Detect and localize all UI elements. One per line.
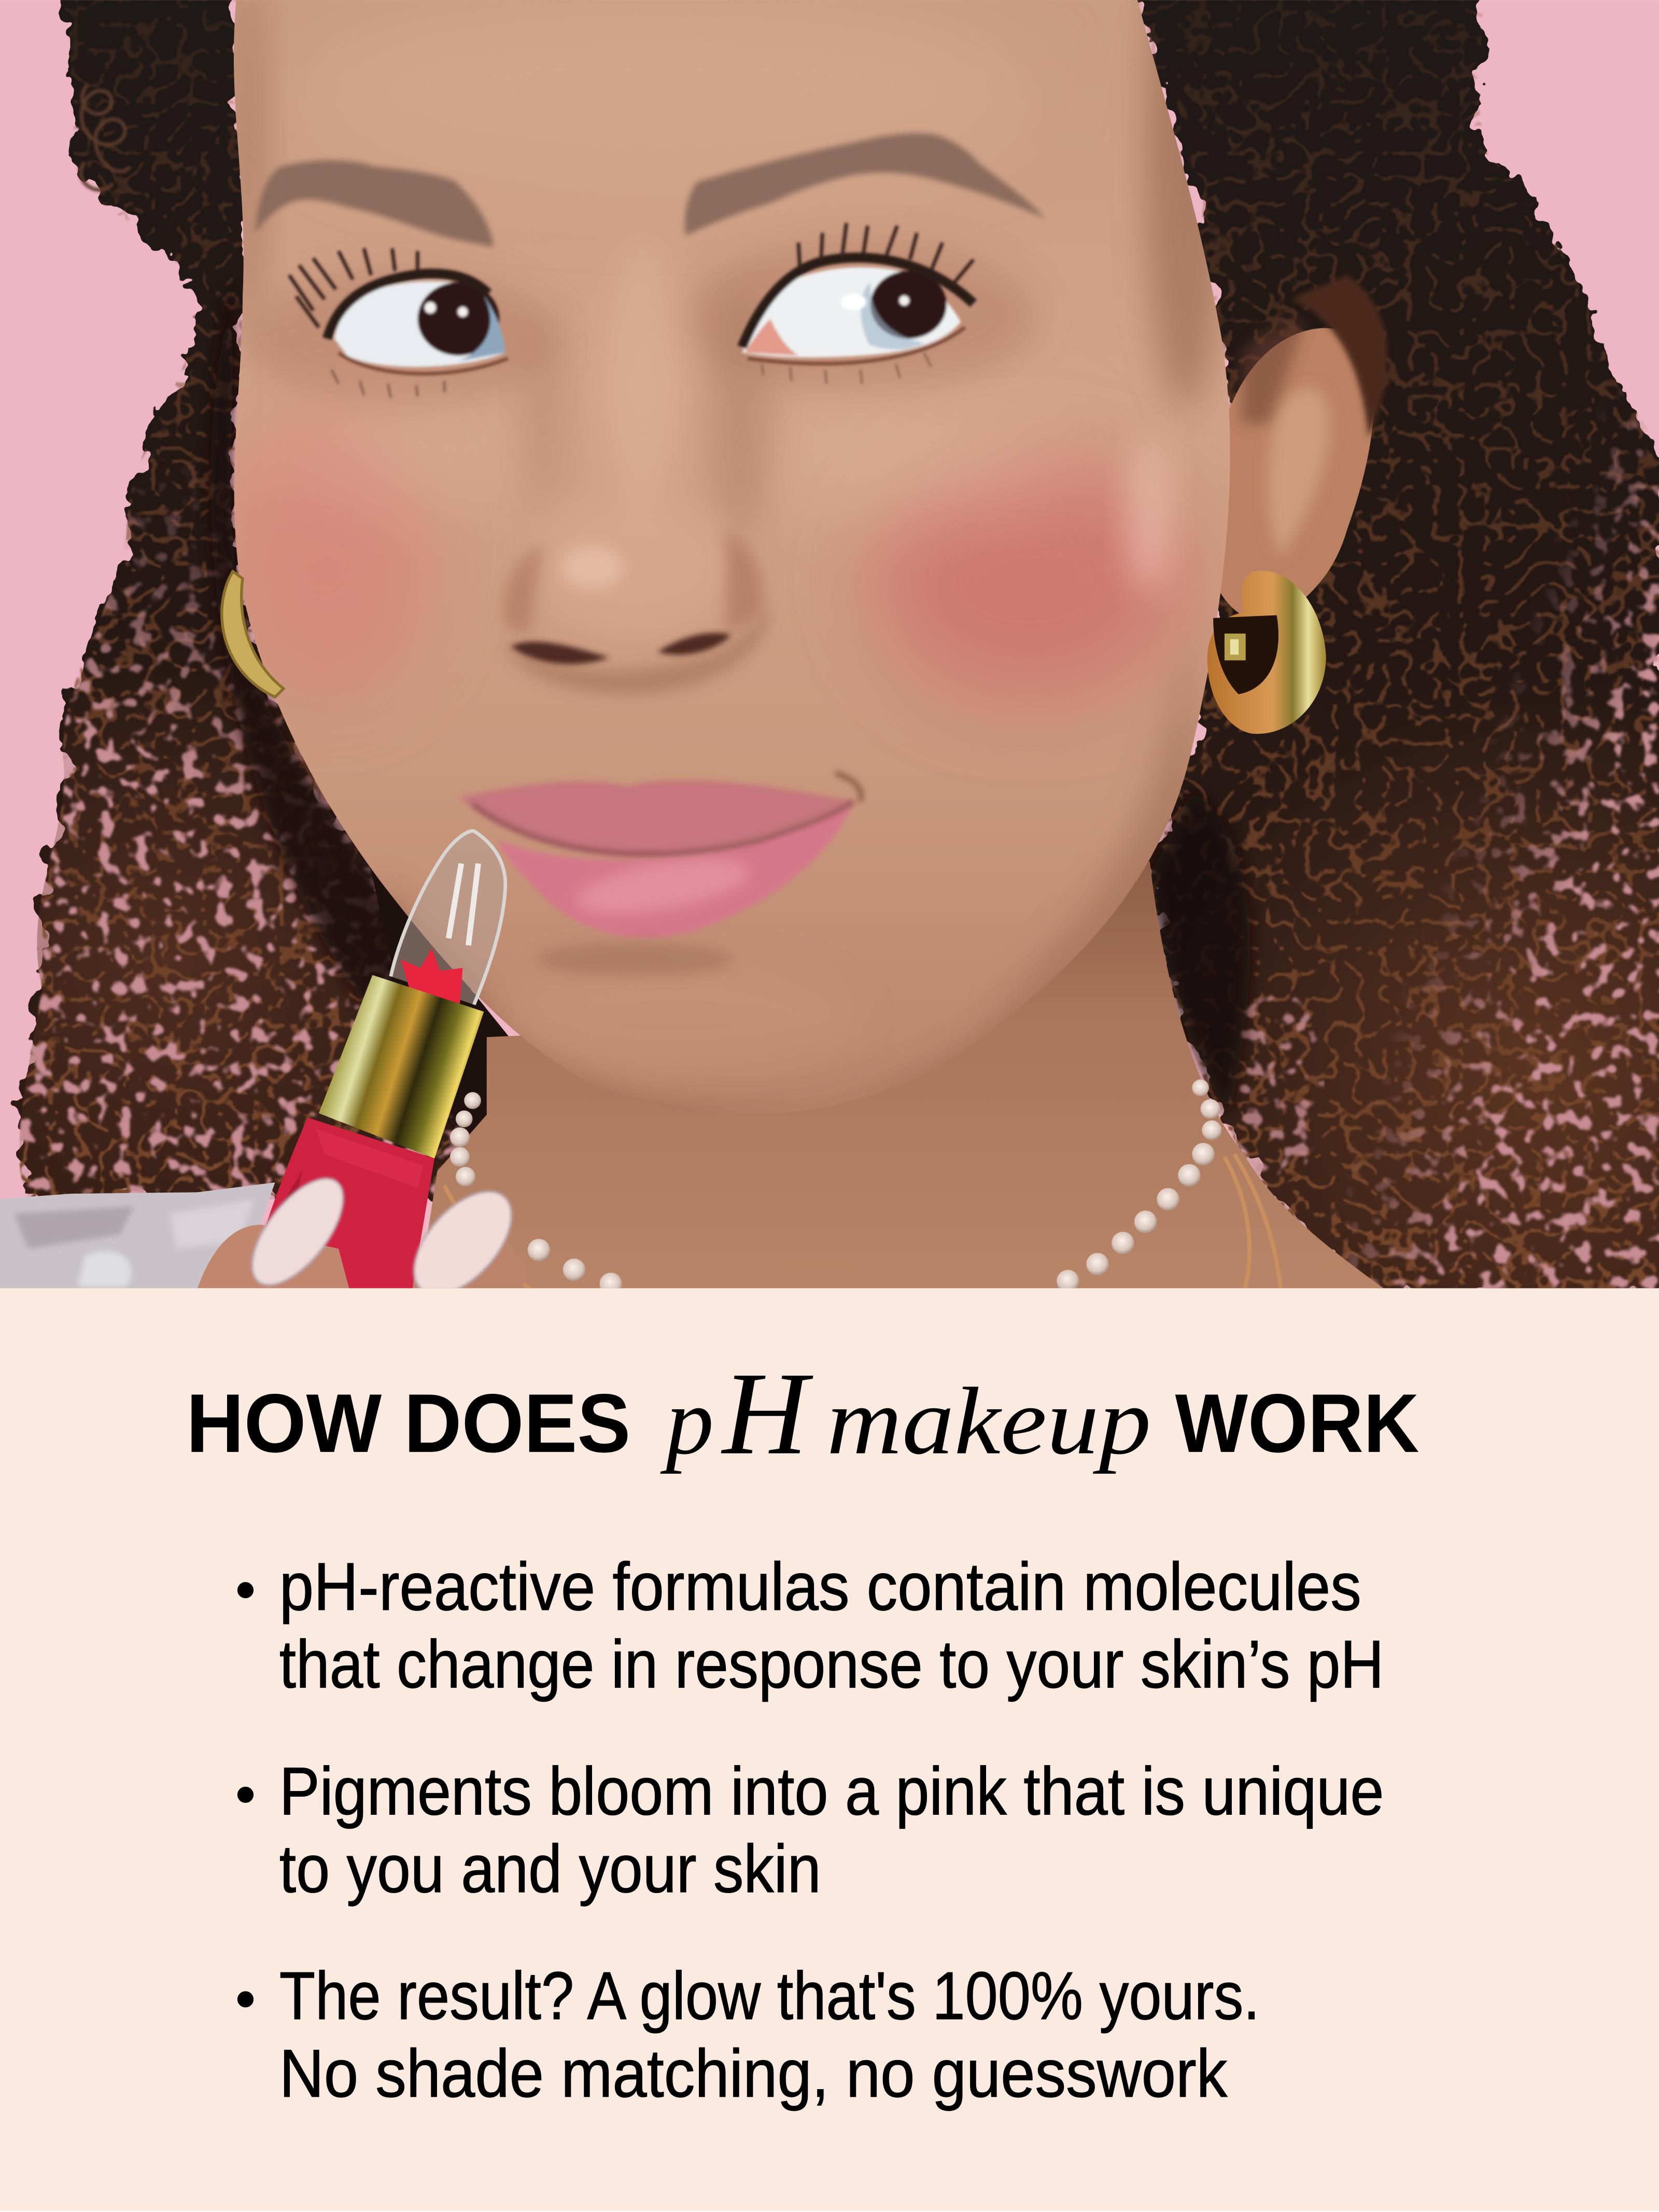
loose curls at left top	[81, 85, 130, 190]
hair: left side	[19, 0, 515, 1199]
neck and chest	[417, 861, 1397, 1298]
bullet list	[238, 1549, 1384, 2111]
bullet 3: No shade matching, no guesswork	[279, 2036, 1228, 2111]
temple shadow	[1146, 0, 1225, 409]
lips	[458, 773, 861, 976]
heading	[186, 1348, 1419, 1479]
nose bridge shade	[710, 282, 771, 536]
eye socket shade	[247, 268, 557, 409]
heading: script pH: pH	[660, 1348, 813, 1479]
pearl necklace	[450, 1080, 1221, 1295]
blush left cheek	[229, 409, 426, 691]
bullet 2: Pigments bloom into a pink that is unique	[279, 1753, 1384, 1829]
bullet 1: that change in response to your skin’s pH	[279, 1626, 1384, 1702]
nose	[501, 494, 769, 694]
bullet 2: to you and your skin	[279, 1831, 821, 1907]
sheer fabric at shoulder	[0, 1182, 275, 1291]
bullet 3	[238, 1958, 1260, 2111]
bullet 1	[238, 1549, 1384, 1702]
heading: script makeup: makeup	[827, 1368, 1151, 1475]
fingers	[198, 1213, 529, 1288]
bullet 2	[238, 1753, 1384, 1907]
heading: bold sans words: HOW DOES	[186, 1377, 630, 1470]
bullet 3: The result? A glow that's 100% yours.	[279, 1958, 1260, 2034]
ear	[1213, 275, 1387, 622]
gold chains	[444, 1154, 1281, 1291]
under-eye light	[762, 413, 1072, 504]
heading: final word: WORK	[1175, 1377, 1419, 1470]
eyebrow: left	[256, 160, 494, 247]
eyebrow: right	[685, 133, 1045, 235]
nails	[235, 1164, 529, 1312]
chin shadow edge	[367, 882, 1100, 1143]
pink studio backdrop	[0, 0, 1659, 1288]
photo: woman applying pH lipstick	[0, 0, 1659, 1312]
face	[212, 0, 1256, 1143]
blush right cheek	[875, 458, 1185, 698]
bullet 1: pH-reactive formulas contain molecules	[279, 1549, 1361, 1625]
lipstick: clear bullet, gold tube, red base	[264, 831, 505, 1291]
earring: right hoop	[1207, 571, 1326, 734]
eye: left	[289, 248, 508, 398]
eye: right	[742, 223, 974, 384]
forehead light	[296, 0, 1030, 184]
hair: right side	[1129, 0, 1659, 1298]
earring: left hoop	[222, 571, 284, 697]
bottom edge line	[0, 2211, 1659, 2212]
